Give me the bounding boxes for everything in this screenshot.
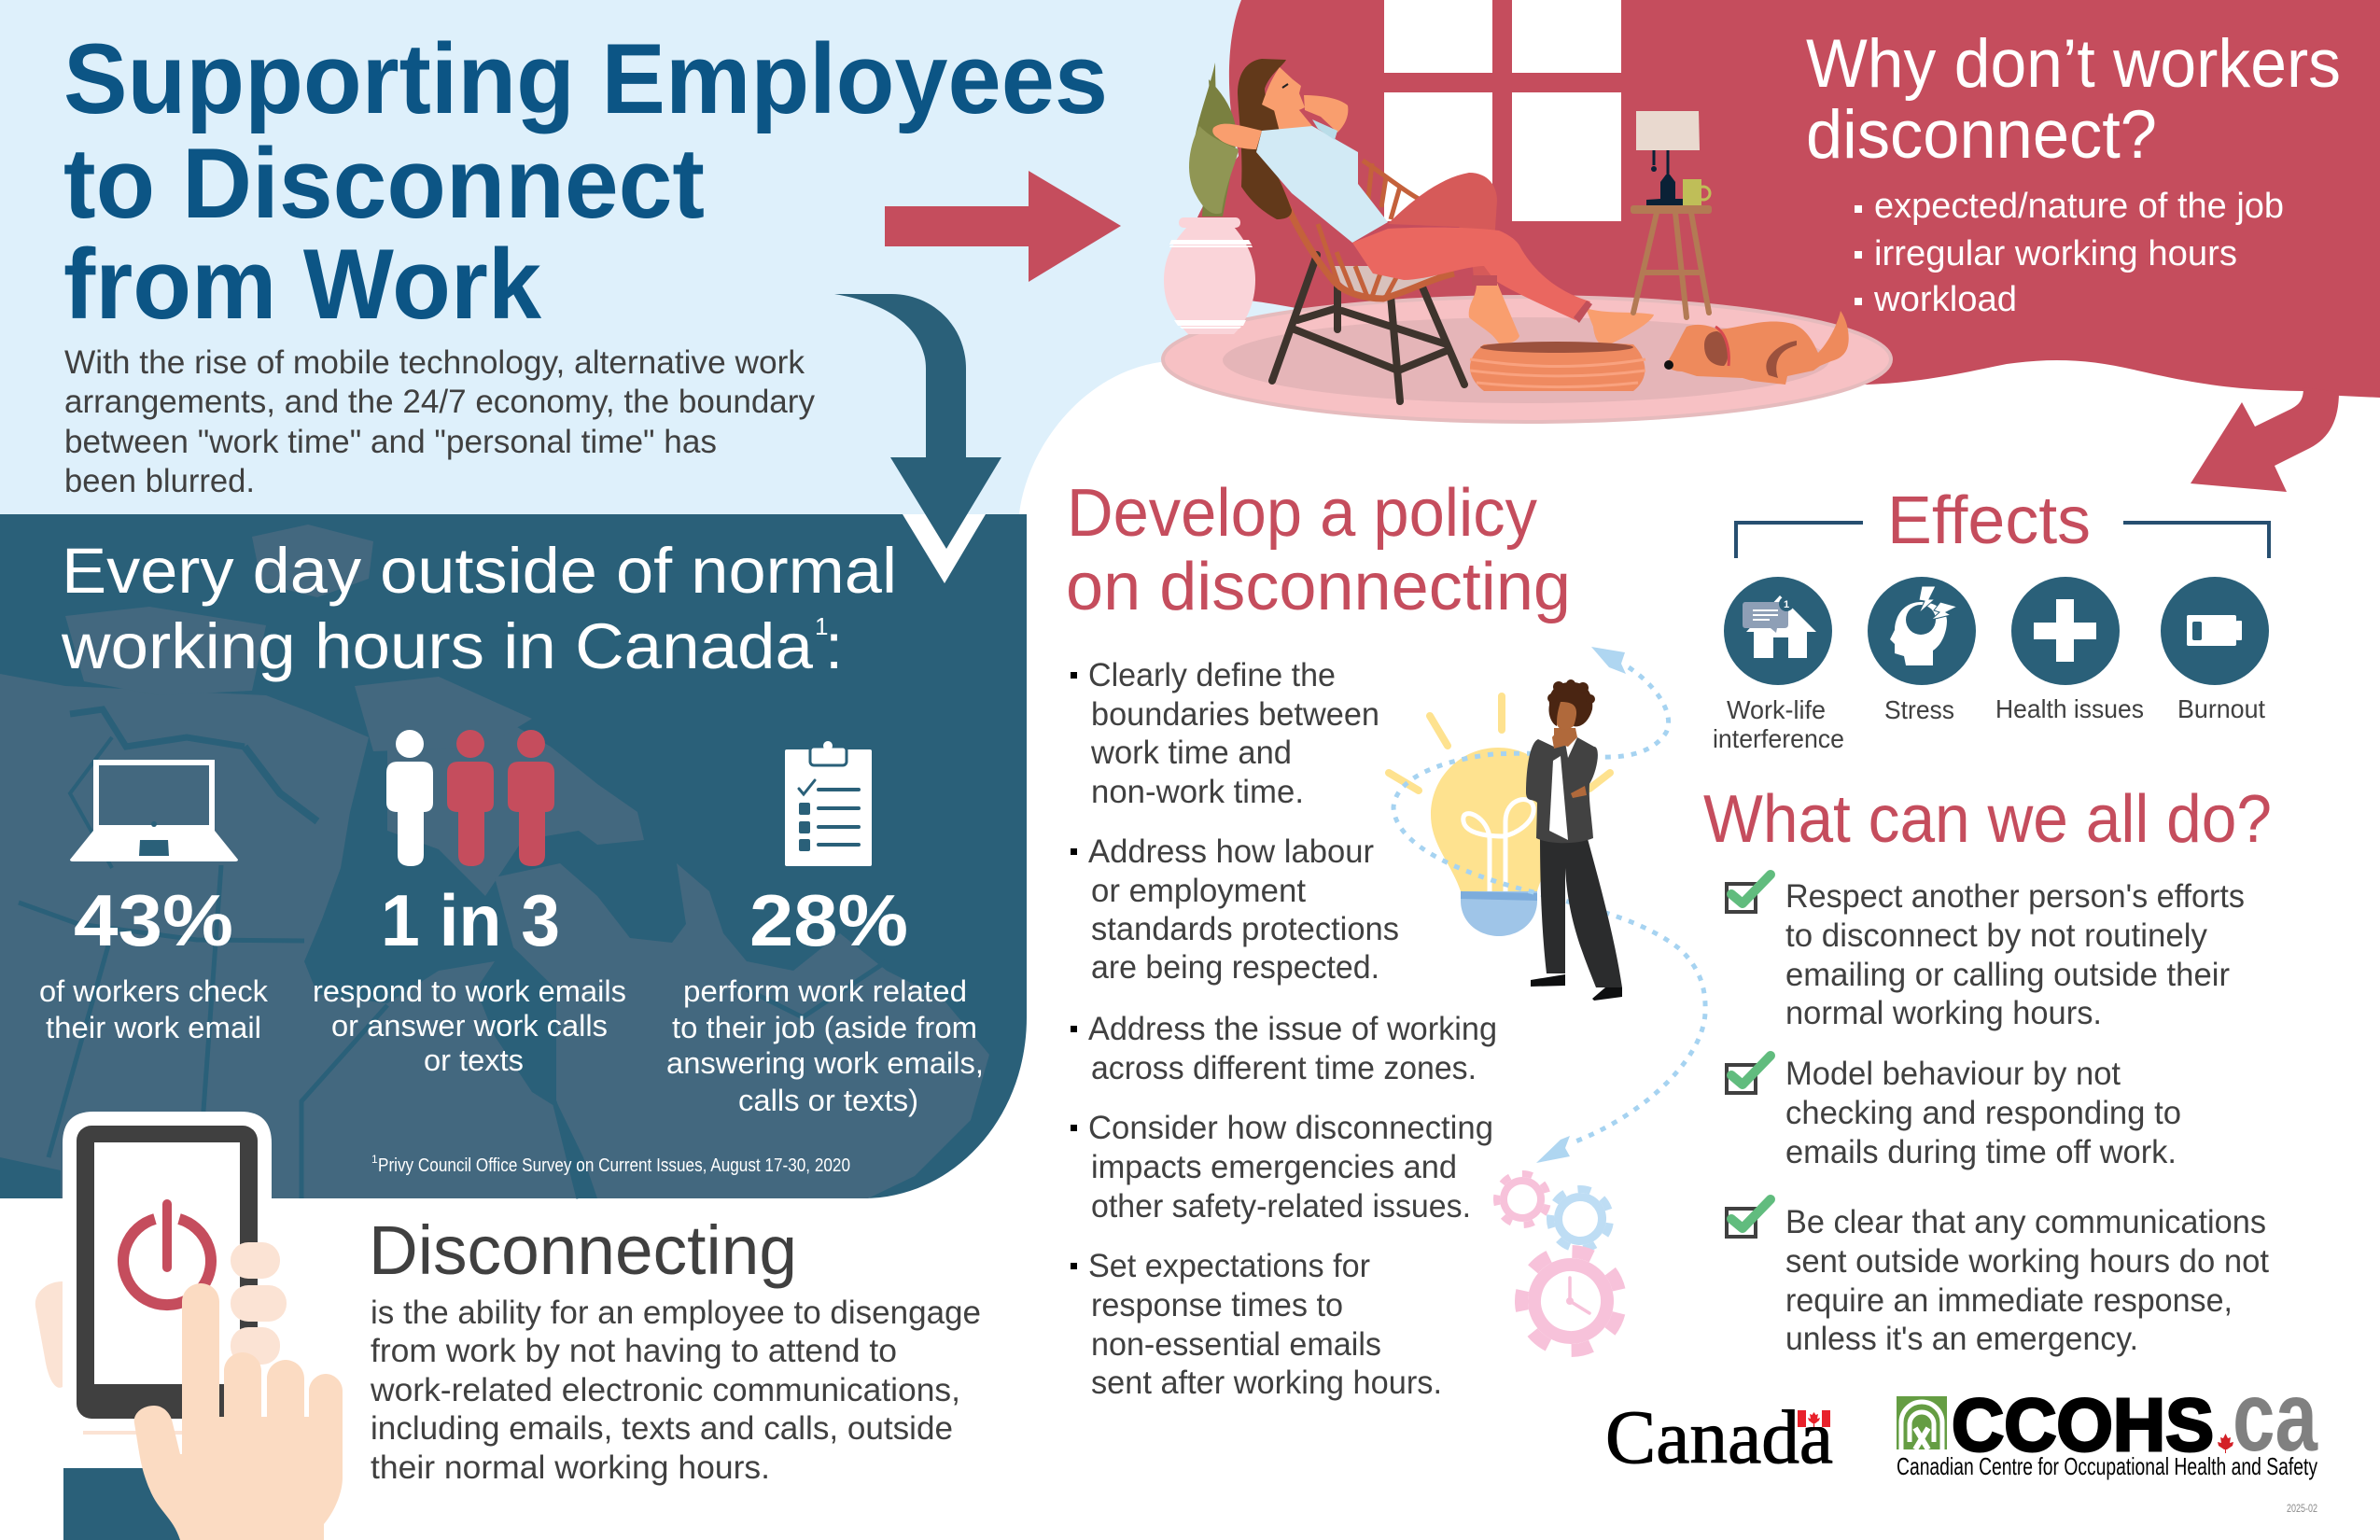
definition: disconnecting: their normal working hours. [371,1449,770,1486]
lightbulb [1389,696,1610,936]
fingers behind phone [231,1242,287,1365]
policy item 4: impacts emergencies and [1091,1149,1457,1185]
intro text [64,344,815,499]
intro text: With the rise of mobile technology, alternative work [64,344,805,381]
policy item 5: response times to [1091,1287,1343,1323]
light blue header background [0,0,1307,514]
reasons list: irregular working hours [1874,234,2237,273]
definition: disconnecting: Disconnecting [369,1211,797,1289]
heading: what can we all do: What can we all do? [1703,782,2272,857]
reasons list: expected/nature of the job [1874,187,2284,226]
action 2: checking and responding to [1785,1095,2181,1131]
policy item 4 [1071,1110,1493,1225]
phone and hand illustration [35,1112,343,1540]
bracket [1736,523,2269,558]
arrow: blue curved down [834,294,1001,549]
map of Canada [0,525,989,1198]
effect: health issues [1995,577,2144,723]
side table with lamp and mug [1631,111,1712,317]
title: Supporting Employees [63,22,1108,134]
stat: 28%: calls or texts) [738,1084,918,1117]
icon: gears with clock [1491,1169,1631,1361]
action 2: Model behaviour by not [1785,1056,2121,1092]
policy item 4: other safety-related issues. [1091,1188,1471,1225]
stat: 43% [39,879,269,1044]
stat: 1 in 3: 1 in 3 [381,879,560,961]
stat: 28% [666,879,984,1117]
logo: CCOHS [1897,1362,2318,1480]
effect: work-life interference: Work-life [1727,695,1826,724]
shirt [1256,126,1388,243]
stat: 1 in 3: or answer work calls [331,1009,608,1043]
heading: develop a policy [1066,476,1571,624]
arrow: red right [885,171,1121,282]
plant [1189,63,1239,217]
section: effects [1713,483,2269,753]
action 3: unless it's an emergency. [1785,1321,2138,1357]
policy list [1071,657,1497,1401]
effect: stress [1868,577,1976,724]
icon: people one in three [386,730,554,866]
logo: CCOHS: CCOHS [1952,1383,2214,1466]
intro text: been blurred. [64,463,255,499]
action 3: Be clear that any communications [1785,1204,2266,1240]
stat: 28%: to their job (aside from [672,1011,977,1044]
intro text: between "work time" and "personal time" has [64,424,717,460]
woman [1212,59,1654,345]
heading: : [825,610,843,682]
logo: CCOHS: ca [2233,1362,2318,1472]
definition: disconnecting [369,1211,981,1486]
policy item 1: non-work time. [1091,774,1304,810]
policy item 5: Set expectations for [1088,1248,1370,1284]
stat: 28%: perform work related [683,974,967,1008]
stat: 28%: answering work emails, [666,1046,984,1080]
hair [1238,59,1292,219]
action 1 [1727,875,2245,1031]
heading: develop a policy: on disconnecting [1066,550,1571,624]
effect: health issues: Health issues [1995,694,2144,723]
dashed flight path [1393,667,1705,1141]
pouf [1470,342,1645,391]
policy item 3: across different time zones. [1091,1050,1477,1086]
policy item 5: non-essential emails [1091,1326,1381,1363]
leg behind [1388,173,1497,280]
policy item 3 [1071,1011,1497,1086]
panel background [0,514,1027,1198]
footnote: 1 [371,1153,378,1166]
chair [1267,156,1464,401]
icon: power [123,1204,211,1305]
action 1: emailing or calling outside their [1785,957,2230,993]
icon: paper plane top [1591,647,1626,674]
illustration: relaxing room [1163,59,1891,422]
policy item 2 [1071,833,1399,986]
province lines [19,709,887,1198]
heading: develop a policy: Develop a policy [1067,476,1537,551]
effect: work-life interference: interference [1713,724,1844,753]
action 1: normal working hours. [1785,995,2102,1031]
window [1384,0,1621,221]
heading [61,535,897,682]
action 1: to disconnect by not routinely [1785,917,2207,954]
heading: why don't workers disconnect: disconnect? [1806,97,2157,173]
definition: disconnecting: from work by not having to attend to [371,1333,897,1369]
stat: 43%: their work email [46,1011,261,1044]
heading: 1 [815,612,828,640]
effect: stress: Stress [1884,695,1954,724]
stat: 28%: 28% [749,879,908,961]
definition: disconnecting: work-related electronic communications, [370,1372,960,1408]
policy item 2: are being respected. [1091,949,1379,986]
phone body [77,1126,258,1419]
date code: 2025-02 [2287,1502,2317,1515]
definition: disconnecting: is the ability for an employee to disengage [371,1295,981,1331]
icon: paper plane bottom [1536,1136,1570,1163]
stat: 1 in 3 [313,879,626,1077]
vase [1164,217,1255,334]
definition: disconnecting: including emails, texts and calls, outside [371,1410,953,1447]
effect: work-life interference: 1 [1784,599,1789,610]
rug [1163,297,1891,422]
palm behind [35,1281,63,1388]
action 2 [1727,1056,2181,1170]
title: from Work [63,228,541,340]
policy item 1: boundaries between [1091,696,1379,733]
policy item 1 [1071,657,1379,810]
stat: 1 in 3: respond to work emails [313,974,626,1008]
action 3 [1727,1199,2269,1357]
icon: laptop [70,763,238,861]
dog [1664,311,1849,385]
stat: 43%: 43% [74,879,233,961]
title: to Disconnect [63,127,705,239]
red panel background [1195,0,2380,398]
policy item 2: Address how labour [1088,833,1374,870]
policy item 3: Address the issue of working [1088,1011,1497,1047]
policy item 5 [1071,1248,1442,1401]
arrow: red curved to effects [2191,387,2339,492]
reasons list: workload [1873,280,2017,319]
policy item 4: Consider how disconnecting [1088,1110,1493,1146]
eye [1282,84,1288,88]
heading: working hours in Canada [61,610,814,682]
policy item 1: work time and [1090,735,1292,771]
action 2: emails during time off work. [1785,1134,2177,1170]
man [1526,679,1622,1001]
policy item 2: standards protections [1091,911,1399,947]
stat: 43%: of workers check [39,974,269,1008]
effect: burnout: Burnout [2177,694,2265,723]
reasons list [1855,187,2284,319]
action 3: require an immediate response, [1785,1282,2233,1319]
effect: work-life interference [1713,577,1844,753]
panel: statistics [0,514,1027,1198]
heading: Every day outside of normal [62,535,897,607]
effect: burnout [2161,577,2269,723]
sleeve [63,1468,194,1540]
actions list [1727,875,2269,1357]
phone white outline [63,1112,272,1456]
pants [1352,228,1590,320]
policy item 2: or employment [1091,873,1306,909]
stat: 1 in 3: or texts [424,1043,524,1077]
policy item 1: Clearly define the [1088,657,1336,693]
logo: Canada wordmark: Canada [1605,1394,1833,1479]
skin [1212,67,1654,345]
intro text: arrangements, and the 24/7 economy, the boundary [64,384,815,420]
hand [134,1283,343,1540]
icon: checklist clipboard [785,741,872,866]
heading: why don't workers disconnect [1806,26,2341,173]
policy item 5: sent after working hours. [1091,1365,1442,1401]
action 3: sent outside working hours do not [1785,1243,2269,1280]
illustration: man with lightbulb [1389,647,1705,1163]
footnote: Privy Council Office Survey on Current Issues, August 17-30, 2020 [378,1155,850,1176]
heading: Effects [1887,483,2091,558]
action 1: Respect another person's efforts [1785,878,2245,915]
title [63,22,1108,340]
heading: why don't workers disconnect: Why don’t workers [1806,26,2341,102]
